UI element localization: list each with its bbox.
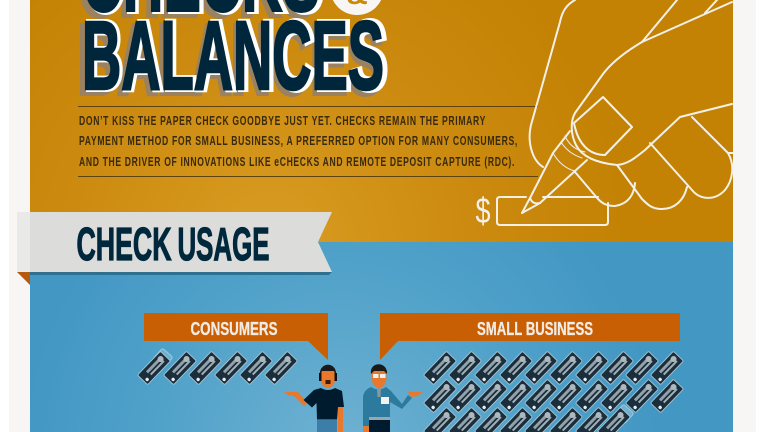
index finger [572,2,732,165]
extended arm [284,392,308,406]
intro text block: AND THE DRIVER OF INNOVATIONS LIKE eCHECKS AND REMOTE DEPOSIT CAPTURE (RDC). [79,154,515,169]
icon: dollar sign: $ [476,190,490,231]
jeans [317,420,337,432]
pants [369,420,390,432]
tie [377,388,381,397]
figure: small business man [363,364,423,432]
check amount box [497,197,608,225]
shirt and extended arm [363,387,412,426]
id badge [381,397,389,404]
belt [369,417,390,420]
title word: BALANCES [78,1,388,114]
pen [522,131,570,213]
title: CHECKS & BALANCES [78,0,388,114]
icon: hand writing a check [497,0,733,225]
intro text block [78,106,538,177]
banner shadow [30,272,332,275]
callout: consumers [144,313,328,360]
goatee [326,380,330,384]
callout: small business [380,313,680,360]
banner fold [17,272,30,285]
left arm [363,425,369,432]
ampersand badge [330,0,384,15]
title word: BALANCES: BALANCES [84,1,388,110]
lower fingers [650,117,732,198]
intro text block: PAYMENT METHOD FOR SMALL BUSINESS, A PREFERRED OPTION FOR MANY CONSUMERS, [79,133,518,148]
fingernail [574,97,632,155]
title word: BALANCES: BALANCES [78,5,384,114]
callout: consumers: CONSUMERS [190,319,278,339]
hand [408,392,423,397]
callout: small business: SMALL BUSINESS [477,319,593,339]
banner ribbon [30,212,332,272]
shirt [304,388,344,420]
icons: consumer checks [138,348,297,385]
intro text block: DON’T KISS THE PAPER CHECK GOODBYE JUST YET. CHECKS REMAIN THE PRIMARY [79,113,486,128]
headset [319,373,322,381]
hair [371,364,387,374]
panel: blue check usage [30,242,733,432]
title word: CHECKS [78,0,324,36]
title word: BALANCES: BALANCES [82,1,384,110]
right arm [338,406,343,432]
glasses [373,374,386,378]
icons: small business checks [424,351,683,432]
banner: check usage [17,212,332,285]
figure: consumer man [284,365,344,432]
neck and face [372,366,386,388]
panel: gold header [30,0,733,242]
section heading: USAGE [178,218,270,270]
neck and face [320,366,336,388]
hair [320,365,336,376]
back of hand [530,0,575,167]
section heading: CHECK [76,218,172,270]
